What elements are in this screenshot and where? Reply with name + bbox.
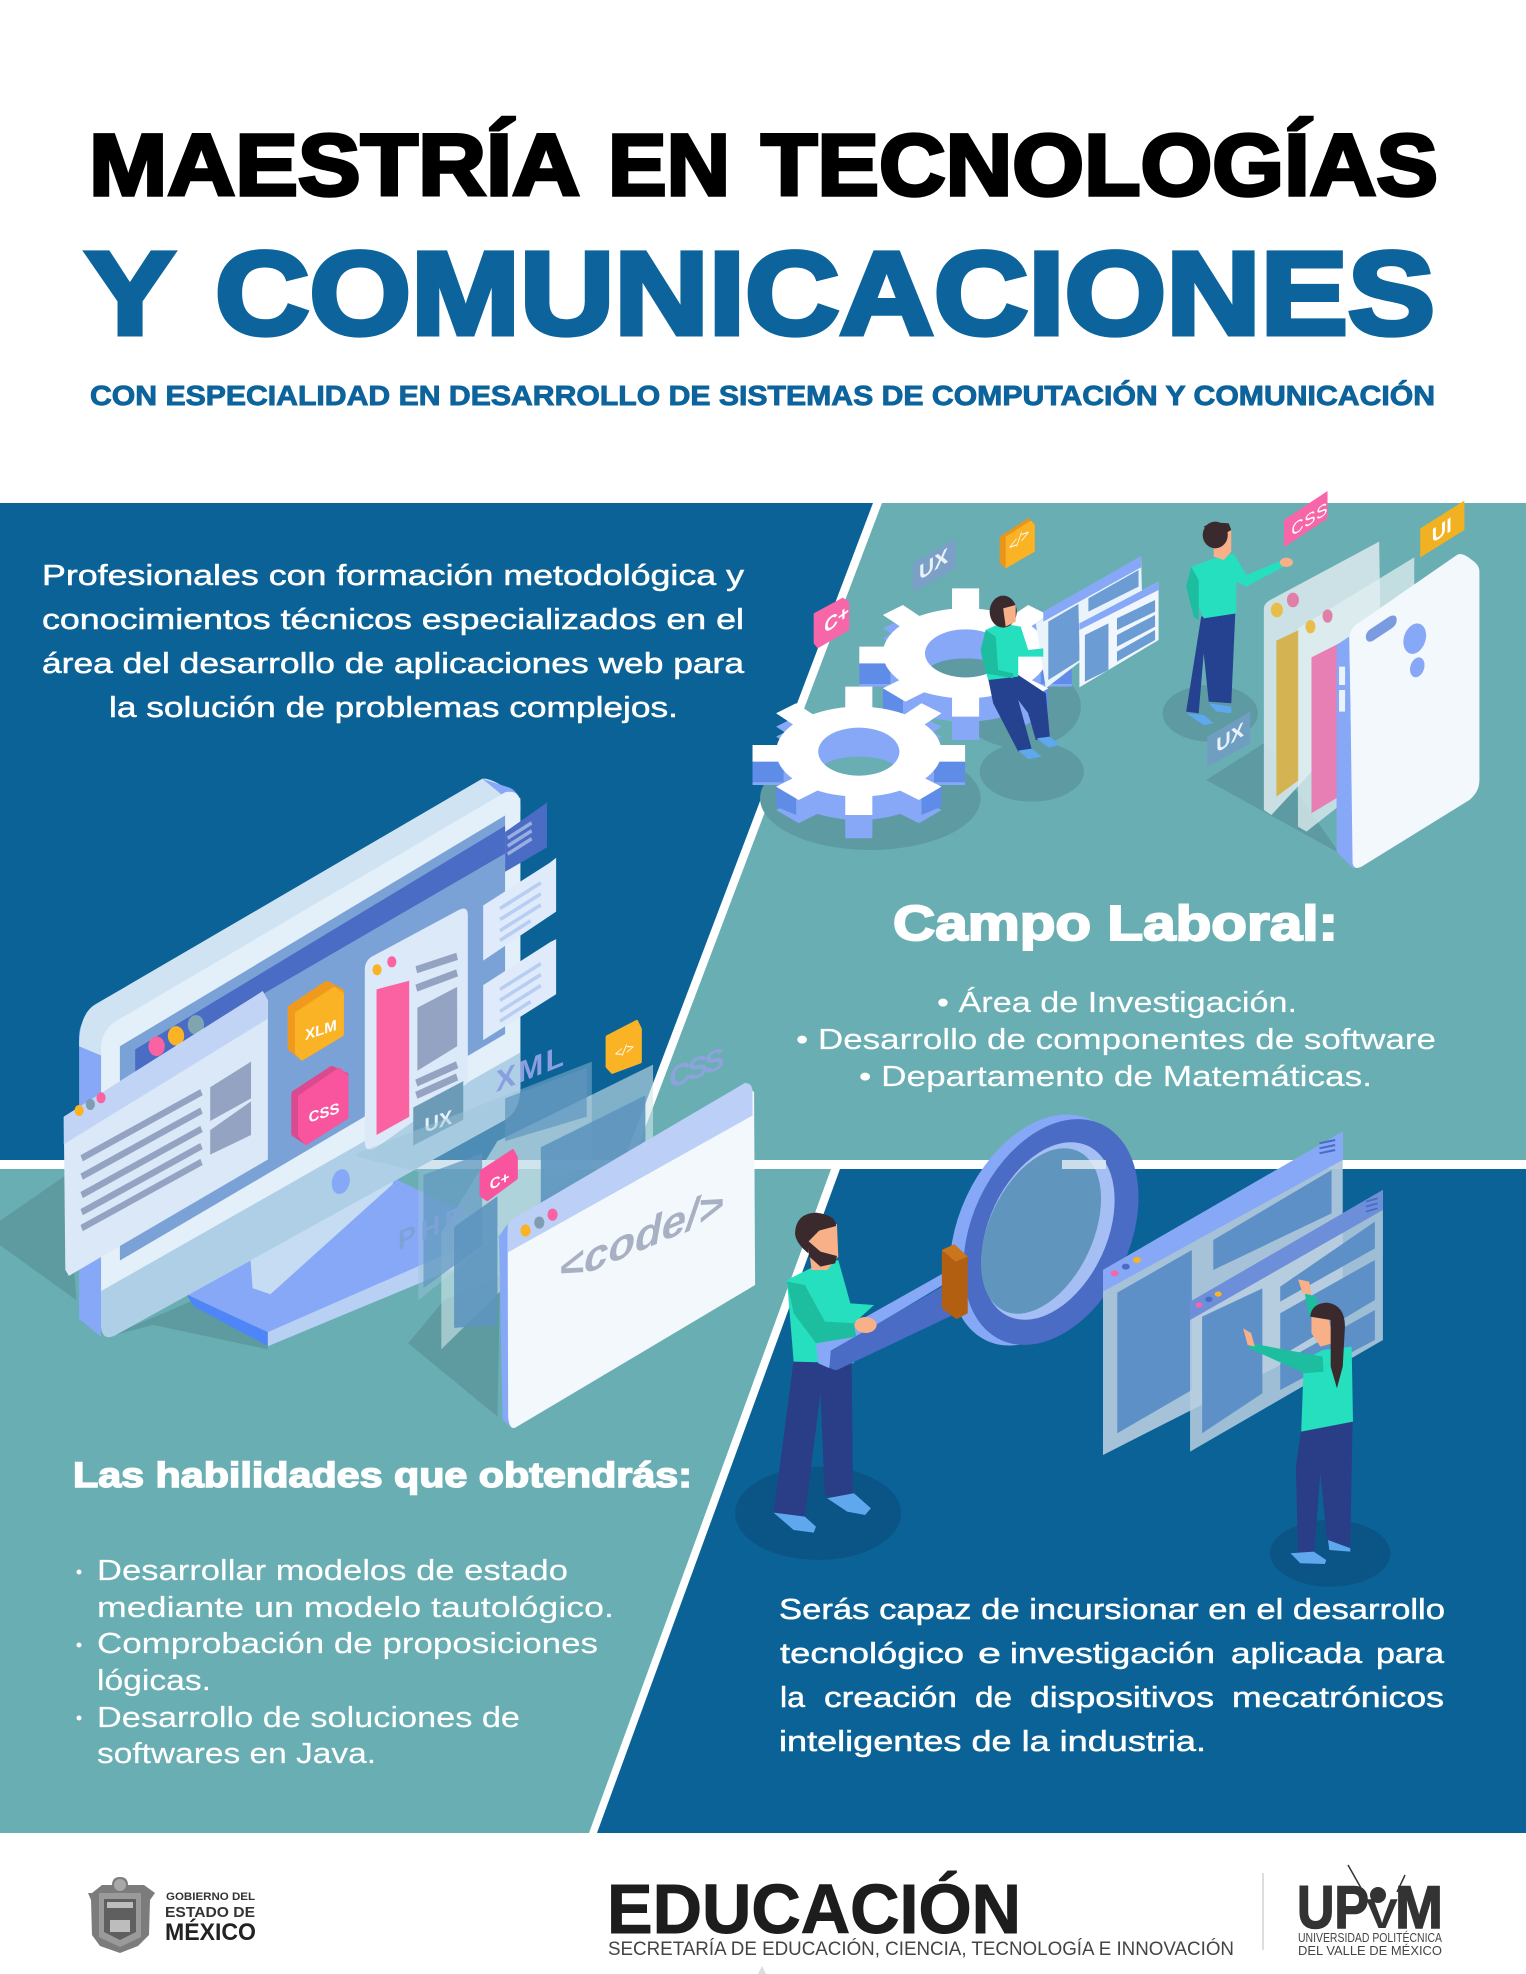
illustration: monitor with code windows — [0, 779, 755, 1429]
text block: capabilities: aplicada — [1231, 1638, 1363, 1670]
text block: capabilities: dispositivos — [1030, 1682, 1214, 1714]
title: line one — [89, 117, 1438, 214]
tile XLM: XLM — [305, 1017, 337, 1044]
panel: top right campo laboral — [633, 503, 1526, 1160]
magnifier ring and lens — [915, 1086, 1173, 1374]
floating label CSS: CSS — [669, 1040, 724, 1096]
list: skills: mediante un modelo tautológico. — [97, 1592, 614, 1624]
code window: <code/> — [559, 1178, 724, 1295]
front left window — [64, 991, 268, 1276]
logo: Educación: EDUCACIÓN — [607, 1870, 1021, 1948]
list: skills: softwares en Java. — [97, 1738, 376, 1770]
side cards — [483, 858, 556, 1040]
man's arm and hand — [787, 1282, 877, 1343]
text block: capabilities: la — [780, 1682, 806, 1714]
text block: profile description: Profesionales con formación metodológica y — [42, 560, 745, 592]
list: campo laboral items: • Departamento de Matemáticas. — [859, 1061, 1372, 1093]
text block: capabilities: e — [978, 1638, 1001, 1670]
title: line one: MAESTRÍA — [89, 117, 580, 214]
code window — [499, 1083, 755, 1429]
tile C+ — [814, 598, 849, 648]
subtitle: CON ESPECIALIDAD EN DESARROLLO DE SISTEMAS DE COMPUTACIÓN Y COMUNICACIÓN — [90, 380, 1435, 411]
woman sitting — [981, 596, 1060, 759]
tile CSS: CSS — [309, 1100, 340, 1127]
heading: Campo Laboral: Campo Laboral: — [893, 897, 1338, 951]
tag UI: UI — [1432, 512, 1452, 548]
text block: capabilities: de — [975, 1682, 1012, 1714]
title: line one: EN — [608, 117, 730, 214]
illustration: gears, woman, man and phone — [753, 491, 1479, 869]
gear back — [859, 588, 1072, 740]
heading: skills: Las habilidades que obtendrás: — [73, 1456, 692, 1495]
tag UX — [413, 1081, 463, 1145]
logo: UPVM: UNIVERSIDAD POLITÉCNICA — [1298, 1930, 1443, 1945]
list: skills: Desarrollo de soluciones de — [97, 1702, 520, 1734]
panel: bottom right capabilities — [597, 1169, 1526, 1833]
panel: top left profile — [0, 503, 873, 1160]
gear front — [753, 687, 965, 838]
logo: Gobierno del Estado de México: MÉXICO — [165, 1918, 256, 1946]
title: line one: TECNOLOGÍAS — [761, 117, 1438, 214]
tile CSS — [293, 1068, 346, 1142]
magnifier collar — [942, 1244, 968, 1319]
panel: bottom left skills — [0, 1169, 831, 1833]
tag CSS: CSS — [1291, 498, 1327, 540]
tag UX second — [1207, 712, 1250, 767]
tile C+: C+ — [824, 600, 849, 638]
text block: capabilities: investigación — [1010, 1638, 1215, 1670]
illustration: people and windows with magnifier — [774, 1132, 1383, 1564]
list: campo laboral items — [796, 987, 1436, 1093]
logo: UPVM: DEL VALLE DE MÉXICO — [1298, 1943, 1442, 1958]
logo: Gobierno del Estado de México: ESTADO DE — [165, 1904, 255, 1921]
tile C+: C+ — [490, 1169, 509, 1194]
figure shadows — [735, 1467, 1390, 1587]
text block: profile description: conocimientos técnicos especializados en el — [42, 604, 744, 636]
window pair behind woman — [1036, 556, 1159, 688]
text block: capabilities: creación — [824, 1682, 957, 1714]
logo: UPVM: V — [1366, 1890, 1398, 1937]
woman with ponytail — [1243, 1279, 1353, 1564]
text block: profile description: la solución de problemas complejos. — [109, 692, 678, 724]
text block: capabilities: tecnológico — [780, 1638, 964, 1670]
list: skills: lógicas. — [97, 1665, 211, 1697]
list: skills: Comprobación de proposiciones — [97, 1628, 598, 1660]
tile code brackets — [607, 1022, 640, 1072]
logo: UPVM: UP — [1297, 1874, 1369, 1941]
text block: capabilities — [779, 1594, 1445, 1758]
list: skills — [76, 1555, 614, 1770]
floating label XML: XML — [496, 1038, 564, 1099]
man standing — [1186, 522, 1293, 725]
tile code brackets: </> — [1009, 524, 1029, 556]
windows — [1103, 1132, 1383, 1455]
list: skills: Desarrollar modelos de estado — [97, 1555, 568, 1587]
monitor body — [79, 779, 520, 1337]
list: campo laboral items: • Área de Investigación. — [937, 987, 1297, 1019]
logo: Educación: SECRETARÍA DE EDUCACIÓN, CIENCIA, TECNOLOGÍA E INNOVACIÓN — [608, 1938, 1234, 1960]
tile C+ — [481, 1151, 516, 1199]
logo: Gobierno del Estado de México — [88, 1877, 256, 1953]
title: line two: COMUNICACIONES — [215, 228, 1435, 360]
text block: capabilities: Serás capaz de incursionar en el desarrollo — [779, 1594, 1445, 1626]
floating label PHP: PHP — [398, 1200, 463, 1256]
text block: capabilities: mecatrónicos — [1232, 1682, 1444, 1714]
title: line two: Y — [85, 228, 175, 360]
magnifier handle — [816, 1268, 957, 1370]
translucent layered panels — [357, 1062, 653, 1349]
tag UI — [1420, 501, 1464, 557]
text block: capabilities: para — [1376, 1638, 1445, 1670]
tag UX first — [913, 538, 956, 592]
centre app window — [365, 909, 468, 1150]
phone — [1337, 554, 1479, 869]
tag CSS — [1284, 491, 1328, 547]
translucent screen layers — [1264, 542, 1414, 832]
text block: capabilities: inteligentes de la industria. — [779, 1726, 1206, 1758]
tag UX second: UX — [1216, 717, 1244, 758]
tag UX first: UX — [919, 542, 949, 585]
traffic dots behind window — [148, 1015, 204, 1056]
logo: Gobierno del Estado de México: GOBIERNO DEL — [166, 1891, 255, 1903]
tile code brackets — [1000, 518, 1035, 568]
tag UX: UX — [424, 1106, 453, 1137]
tile XLM — [290, 983, 342, 1058]
logo: UPVM: M — [1395, 1874, 1443, 1941]
divider: horizontal white band — [0, 1160, 1526, 1169]
list: campo laboral items: • Desarrollo de componentes de software — [796, 1024, 1436, 1056]
monitor menu tab — [505, 803, 547, 872]
logo: UPVM — [1297, 1865, 1443, 1958]
tile code brackets: </> — [615, 1039, 634, 1061]
man with beard — [774, 1213, 874, 1533]
text block: profile description: área del desarrollo de aplicaciones web para — [42, 648, 745, 680]
ground shadows — [760, 665, 1342, 857]
text block: profile description — [42, 560, 745, 724]
logo: Educación — [607, 1870, 1234, 1960]
monitor stand — [186, 1172, 503, 1346]
